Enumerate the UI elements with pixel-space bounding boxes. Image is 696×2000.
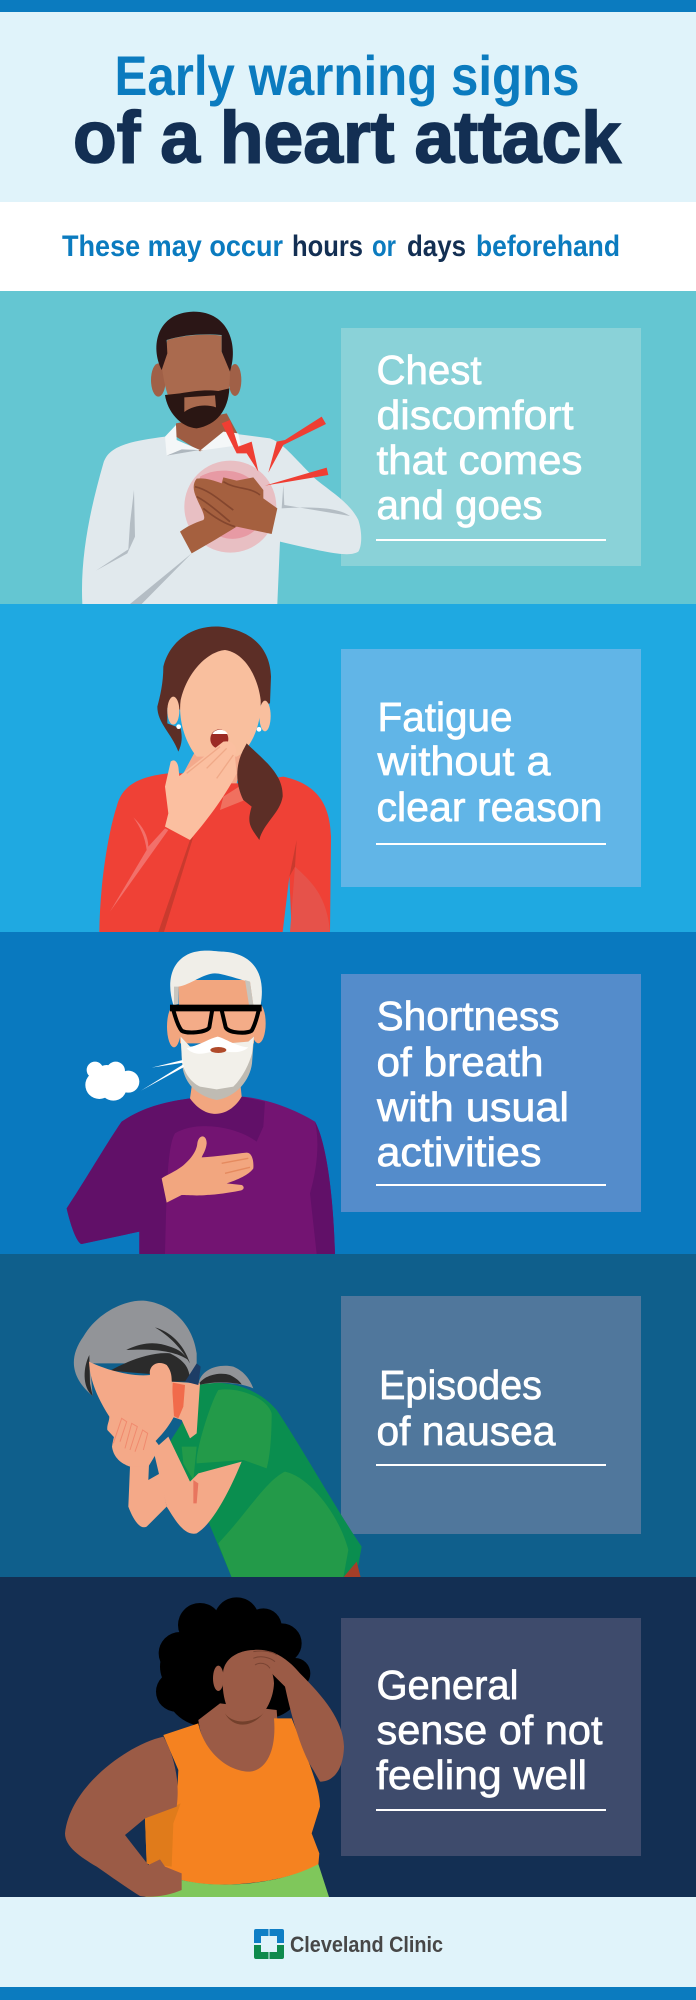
header panel (0, 12, 696, 202)
text box: fatigue: without a (376, 738, 551, 784)
logo: Cleveland Clinic mark (254, 1929, 284, 1959)
text box: chest discomfort: and goes (376, 482, 542, 528)
subtitle text: hours (292, 230, 363, 263)
text box: nausea: Episodes (379, 1362, 542, 1408)
text box: shortness of breath: activities (376, 1129, 542, 1175)
logo: wordmark: Cleveland Clinic (290, 1932, 443, 1957)
text box: nausea: of nausea (376, 1408, 556, 1454)
text box: shortness of breath: with usual (376, 1084, 569, 1130)
panel: shortness of breath (0, 932, 696, 1254)
panel: nausea (0, 1254, 696, 1577)
panel: not feeling well (0, 1577, 696, 1898)
title line 1: Early warning signs (114, 44, 580, 107)
illustration: man holding chest (82, 312, 361, 604)
text box: shortness of breath (341, 974, 641, 1212)
panel: chest discomfort (0, 291, 696, 604)
text box: nausea (341, 1296, 641, 1534)
illustration: unwell woman (65, 1597, 344, 1898)
bottom bar (0, 1987, 696, 2000)
text box: shortness of breath: of breath (376, 1039, 544, 1085)
illustration: woman yawning (99, 627, 331, 932)
panel: fatigue (0, 604, 696, 932)
footer panel (0, 1897, 696, 1987)
text box: fatigue: Fatigue (378, 694, 512, 740)
text box: not feeling well: feeling well (376, 1752, 587, 1798)
subtitle text: days (407, 230, 466, 263)
illustration: man short of breath (67, 951, 335, 1254)
illustration: woman with nausea (74, 1301, 362, 1577)
text box: chest discomfort: Chest (376, 347, 482, 393)
text box: not feeling well (341, 1618, 641, 1856)
subtitle text: These may occur (62, 230, 283, 263)
top bar (0, 0, 696, 12)
text box: not feeling well: sense of not (376, 1707, 603, 1753)
subtitle panel (0, 202, 696, 291)
text box: chest discomfort: that comes (376, 437, 582, 483)
subtitle text (62, 230, 620, 263)
text box: chest discomfort: discomfort (376, 392, 574, 438)
title line 2: of a heart attack (73, 98, 621, 178)
subtitle text: or (372, 230, 396, 263)
text box: not feeling well: General (376, 1662, 518, 1708)
text box: shortness of breath: Shortness (376, 993, 560, 1039)
subtitle text: beforehand (476, 230, 620, 263)
text box: chest discomfort (341, 328, 641, 566)
text box: fatigue: clear reason (376, 784, 602, 830)
text box: fatigue (341, 649, 641, 887)
